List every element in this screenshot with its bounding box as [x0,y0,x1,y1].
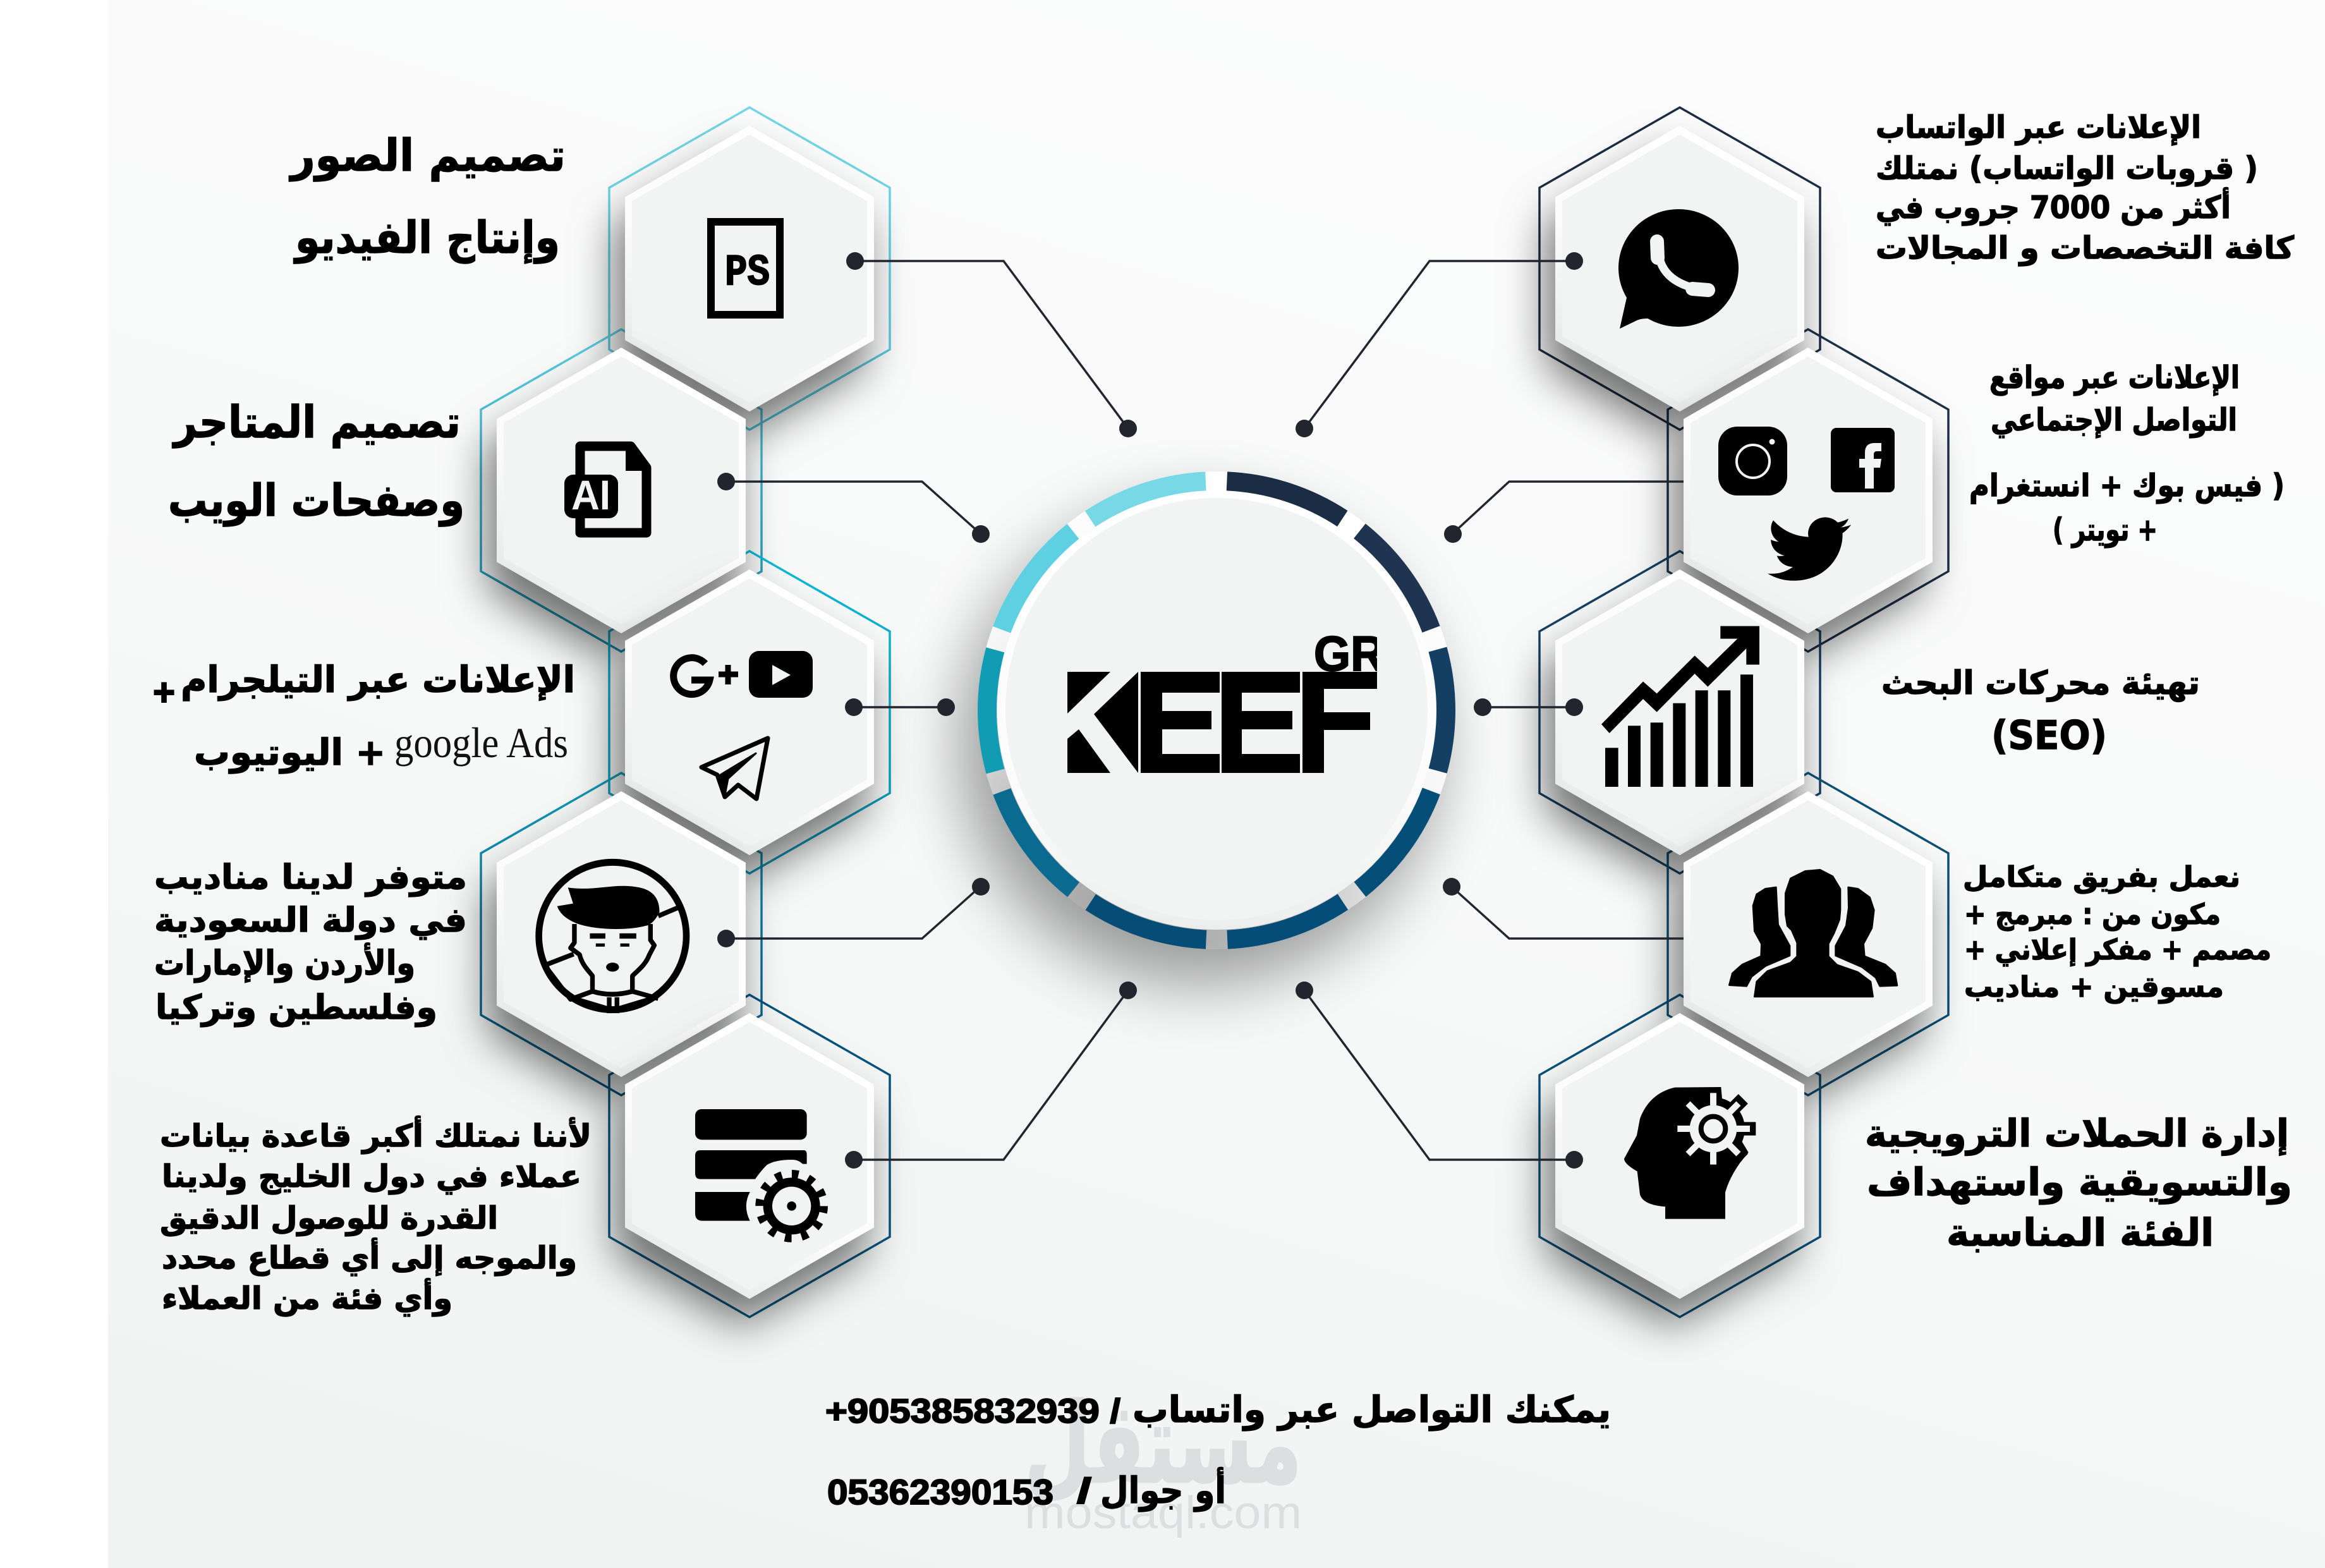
text: photo and video design [289,130,566,264]
text: whatsapp ads [1876,109,2295,267]
logo: KEEF GR [1067,626,1385,773]
watermark [1024,1380,1302,1538]
panel: SEO hexagon [1555,569,1804,855]
text: campaign management: إدارة الحملات الترويجية [1865,1112,2289,1156]
hexagon outlines [481,107,1948,1317]
text: social media ads [1969,360,2285,548]
text: contact details: أو جوال [1100,1467,1226,1512]
icon: Telegram [701,738,768,799]
icon: PS file: PS [725,248,770,298]
panel: whatsapp hexagon [1555,126,1804,411]
text: team: مصمم + مفكر إعلاني + [1964,933,2271,966]
connectors [726,261,1684,1160]
panel: store and web pages hexagon [497,348,746,633]
icon: Twitter [1768,518,1851,581]
text: contact details: / [1077,1471,1092,1510]
text: database: وأي فئة من العملاء [162,1278,452,1317]
text: database: والموجه إلى أي قطاع محدد [162,1237,577,1277]
text: campaign management [1865,1112,2292,1255]
watermark: مستقل [1024,1380,1302,1509]
text: telegram google ads youtube: google Ads [394,719,568,767]
text: contact details: 05362390153 [827,1472,1053,1512]
icon: AI file [564,442,651,533]
panel: photo and video design hexagon [625,126,874,411]
text: telegram google ads youtube: + [153,671,175,714]
text: SEO: تهيئة محركات البحث [1881,665,2200,702]
text: whatsapp ads: الإعلانات عبر الواتساب [1876,109,2201,145]
text: database [160,1115,592,1317]
text: representatives: في دولة السعودية [154,901,467,940]
text: store and web pages design: وصفحات الويب [168,475,464,526]
text: SEO: (SEO) [1991,712,2107,758]
text: social media ads: الإعلانات عبر مواقع [1989,360,2240,396]
panel: database hexagon [625,1013,874,1299]
icon: WhatsApp [1618,209,1739,329]
icon: head with gear [1624,1087,1756,1219]
text: database: عملاء في دول الخليج ولدينا [162,1158,581,1195]
text: telegram google ads youtube [153,659,575,774]
icon: growth chart [1601,626,1759,787]
text: SEO [1881,665,2200,758]
icon: PS file [711,222,780,315]
text: whatsapp ads: أكثر من 7000 جروب في [1876,187,2231,226]
text: team: نعمل بفريق متكامل [1963,860,2240,894]
text: representatives [154,858,467,1027]
text: campaign management: الفئة المناسبة [1946,1211,2214,1255]
text: store and web pages design [168,396,464,526]
text: team [1963,860,2271,1004]
text: contact details: +905385832939 / [825,1392,1120,1430]
text: store and web pages design: تصميم المتاجر [172,396,461,448]
icon: AI file: AI [571,471,610,518]
segmented ring [894,388,1539,1033]
icon: team silhouettes [1729,870,1897,997]
text: database: لأننا نمتلك أكبر قاعدة بيانات [160,1115,592,1154]
text: telegram google ads youtube: الإعلانات عبر التيلجرام [181,659,575,702]
text: campaign management: والتسويقية واستهداف [1867,1160,2292,1205]
icon: YouTube [749,651,813,698]
text: contact details: يمكنك التواصل عبر واتساب [1132,1389,1611,1431]
icon: Facebook [1831,428,1895,492]
icon: representative face in circle [539,862,686,1013]
text: representatives: وفلسطين وتركيا [155,988,437,1027]
icon: Instagram [1718,427,1787,495]
text: database: القدرة للوصول الدقيق [160,1200,498,1236]
panel: representatives hexagon [497,791,746,1077]
text: photo and video design: وإنتاج الفيديو [293,212,560,264]
text: team: مسوقين + مناديب [1964,970,2224,1004]
text: whatsapp ads: ( قروبات الواتساب) نمتلك [1876,150,2258,187]
text: social media ads: + تويتر ) [2053,512,2158,548]
panel: campaign management hexagon [1555,1013,1804,1299]
text: representatives: والأردن والإمارات [154,942,415,983]
text: telegram google ads youtube: + اليوتيوب [194,732,385,774]
connector dots [717,252,1583,1169]
icon: Google Plus [674,658,738,695]
text: social media ads: التواصل الإجتماعي [1991,402,2237,438]
logo: KEEF GR: GR [1314,626,1385,681]
text: contact details [825,1389,1611,1512]
central circle emblem [920,465,1479,1024]
text: social media ads: ( فيس بوك + انستغرام [1969,468,2285,504]
text: whatsapp ads: كافة التخصصات و المجالات [1876,230,2295,267]
panel: telegram google youtube ads hexagon [625,569,874,855]
panel: team hexagon [1684,791,1933,1077]
text: photo and video design: تصميم الصور [289,130,566,181]
text: representatives: متوفر لدينا مناديب [154,858,467,897]
text: team: مكون من : مبرمج + [1964,897,2221,931]
panel: social media hexagon [1684,348,1933,633]
icon: database with gear [695,1109,823,1237]
watermark: mostaql.com [1024,1488,1302,1538]
